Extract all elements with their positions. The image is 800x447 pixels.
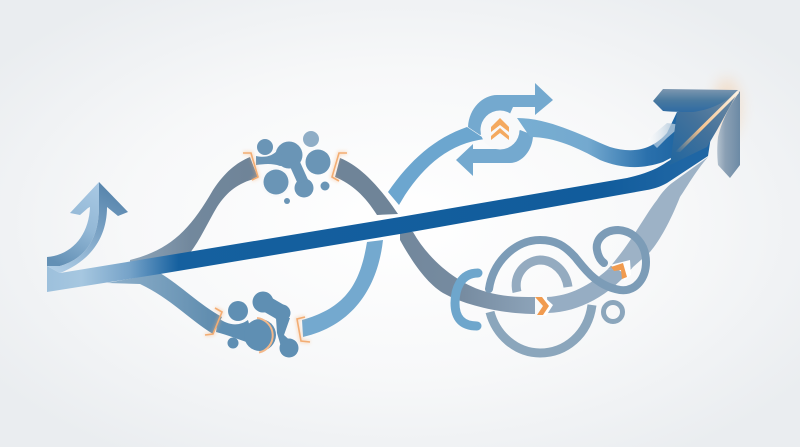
icon: orange chevrons [491,118,509,140]
lower blue-grey strand, left [107,273,222,334]
orange brackets [205,153,347,342]
small up arrow, left [47,182,128,273]
upper molecule cluster [256,131,330,204]
lower molecule cluster [216,292,298,358]
orange brackets, glow [205,153,347,342]
dark core of head [670,92,738,165]
large infinity loop [489,230,646,290]
orange arc on blob [257,318,273,352]
orange chevron on loop [610,260,631,281]
lower arc [490,305,592,353]
flowing blue ribbon to arrowhead [517,112,700,167]
bottom swap arrow [456,130,533,176]
main rising arrow band [47,123,712,292]
lower wing [717,91,740,178]
top swap arrow [468,83,553,135]
upper grey strand, left [130,157,258,268]
upper wing [653,89,738,112]
left half of shaft and head [47,182,99,266]
orange chevron on grey strand [535,295,553,316]
loops and rings [455,230,646,353]
inner arc [516,260,568,292]
swap arrows with chevrons [456,83,700,176]
right half of shaft and head [47,182,128,273]
light blue strand, rising to the swap icon [388,127,485,205]
highlight wedge [648,123,682,148]
white disc behind chevrons [480,110,520,150]
light streak [675,91,739,152]
small ring [604,302,622,322]
arrowhead cluster with glow [653,78,741,178]
blue open ring [455,273,478,326]
light blue strand, lower right section [302,240,383,337]
upper grey strand, right, sweeping into loops [335,157,708,314]
